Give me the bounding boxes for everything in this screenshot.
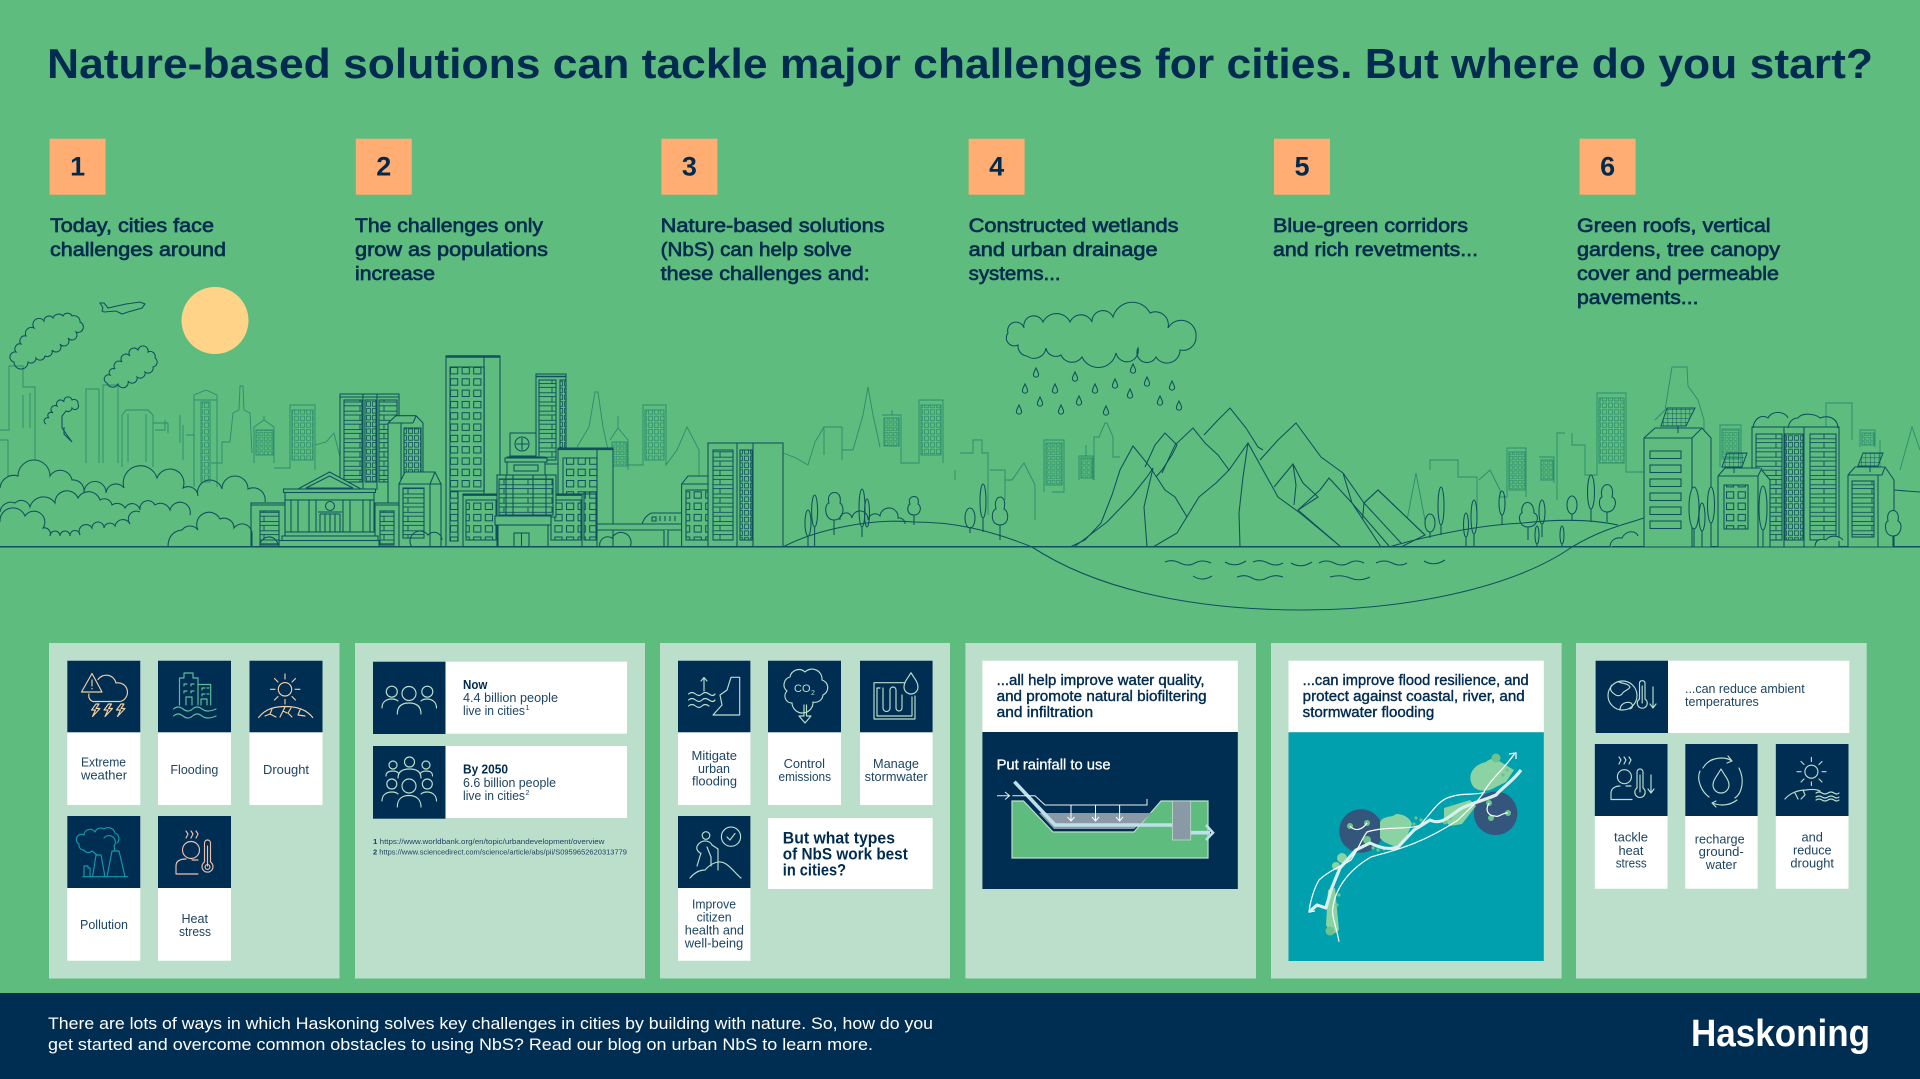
footer text: get started and overcome common obstacles to using NbS? Read our blog on urban NbS to learn more. (48, 1035, 873, 1054)
card: extreme weather (67, 661, 140, 805)
step 6: cover and permeable (1577, 263, 1779, 285)
card: heat stress: stress (179, 924, 211, 939)
mountains (1070, 408, 1425, 547)
card: reduce drought: reduce (1793, 843, 1832, 858)
icon: person and thermometer (1611, 757, 1654, 800)
step 6: gardens, tree canopy (1577, 239, 1780, 261)
right trees (1610, 486, 1901, 547)
smoke clouds (10, 313, 157, 442)
step 3: these challenges and: (661, 263, 870, 285)
diagram: put rainfall to use: Put rainfall to use (997, 757, 1111, 773)
row: ambient temperatures (1596, 661, 1849, 733)
card: recharge groundwater: water (1705, 857, 1737, 872)
background skyline (0, 366, 1920, 520)
icon: flood bank (688, 677, 740, 715)
card: control emissions: 2 (811, 690, 815, 697)
logo: Haskoning: Haskoning (1691, 1013, 1870, 1055)
card: recharge groundwater (1685, 744, 1758, 889)
icon: globe and thermometer (1608, 681, 1656, 710)
step 1: Today, cities face (50, 215, 214, 237)
footer text (48, 1014, 933, 1054)
card: control emissions (768, 661, 841, 805)
card: reduce drought (1776, 744, 1848, 889)
card: tackle heat stress: stress (1616, 856, 1647, 871)
row: by 2050: By 2050 (463, 762, 508, 777)
card: manage stormwater: stormwater (865, 769, 928, 784)
callout: flood resilience: protect against coastal, river, and (1303, 689, 1525, 705)
card: pollution: Pollution (80, 917, 128, 932)
card: mitigate urban flooding: urban (698, 761, 730, 776)
icon: sun, earth and water (1785, 758, 1839, 801)
panel 3 (660, 643, 950, 978)
callout: question: But what types (783, 829, 895, 847)
step 2: grow as populations (355, 239, 548, 261)
step 6: pavements... (1577, 287, 1698, 309)
step 5: Blue-green corridors (1273, 215, 1468, 237)
callout: flood resilience (1288, 661, 1544, 732)
callout: water quality (982, 661, 1238, 732)
card: pollution (67, 816, 140, 961)
step 5: and rich revetments... (1273, 239, 1478, 261)
callout: water quality: and promote natural biofiltering (997, 689, 1207, 705)
step 2: The challenges only (355, 215, 543, 237)
card: mitigate urban flooding: Mitigate (692, 748, 737, 763)
card: extreme weather: weather (80, 768, 128, 782)
panel 4 (965, 643, 1256, 978)
callout: question (768, 818, 933, 889)
footnotes: 1 https://www.worldbank.org/en/topic/urbandevelopment/overview (373, 837, 605, 846)
footer (0, 993, 1920, 1079)
icon: flooding (174, 673, 216, 718)
icon: extreme weather (82, 674, 127, 716)
callout: question: in cities? (783, 861, 846, 879)
step 1 (50, 139, 226, 261)
callout: flood resilience: stormwater flooding (1303, 705, 1434, 721)
panel 1 (49, 643, 340, 978)
solar panels (1661, 408, 1883, 473)
card: improve citizen health: health and (685, 923, 744, 938)
card: reduce drought: drought (1790, 855, 1834, 870)
footnotes: 2 https://www.sciencedirect.com/science/article/abs/pii/S0959652620313779 (373, 848, 627, 856)
row: ambient temperatures: temperatures (1685, 694, 1759, 709)
card: improve citizen health (678, 816, 750, 961)
row: by 2050 (373, 746, 627, 819)
row: now: 4.4 billion people (463, 690, 558, 705)
diagram: put rainfall to use (982, 732, 1238, 889)
card: manage stormwater: Manage (873, 756, 919, 771)
card: extreme weather: Extreme (81, 755, 126, 770)
step 3: 3 (682, 152, 697, 182)
row: ambient temperatures: ...can reduce ambient (1685, 681, 1805, 696)
footer text: There are lots of ways in which Haskoning solves key challenges in cities by building with nature. So, how do you (48, 1014, 933, 1033)
icon: sun (182, 287, 248, 354)
step 6: 6 (1600, 152, 1615, 182)
title: Nature-based solutions can tackle major challenges for cities. But where do you start? (47, 40, 1873, 87)
card: mitigate urban flooding: flooding (692, 774, 737, 789)
step 4 (969, 139, 1179, 285)
step 4: 4 (989, 152, 1004, 182)
card: manage stormwater (860, 661, 933, 805)
icon: drought (259, 674, 313, 718)
card: improve citizen health: Improve (692, 897, 736, 912)
card: improve citizen health: well-being (684, 936, 743, 950)
map: blue-green corridor (1288, 732, 1544, 961)
step 2: increase (355, 263, 435, 285)
green-roof buildings (1644, 412, 1920, 547)
step 3: Nature-based solutions (661, 215, 885, 237)
icon: CO2 cloud (784, 669, 828, 723)
step 3: (NbS) can help solve (661, 239, 852, 261)
step 1: 1 (70, 152, 85, 182)
card: drought (250, 661, 322, 805)
row: by 2050: live in cities (463, 788, 525, 803)
card: control emissions: Control (784, 756, 825, 771)
icon: aeroplane (100, 302, 145, 314)
row: now: 1 (526, 705, 530, 712)
card: heat stress: Heat (182, 911, 208, 926)
footnotes (373, 837, 627, 856)
bushes and trees (0, 460, 1615, 547)
panel 6 (1576, 643, 1867, 978)
icon: heat stress (176, 831, 213, 874)
row: now: live in cities (463, 703, 525, 718)
row: now (373, 662, 627, 734)
step 2: 2 (376, 152, 391, 182)
step 4: Constructed wetlands (969, 215, 1179, 237)
panel 5 (1271, 643, 1562, 978)
icon: lake waves (1165, 560, 1445, 580)
card: tackle heat stress: heat (1618, 843, 1644, 858)
card: drought: Drought (263, 762, 309, 777)
card: reduce drought: and (1802, 829, 1823, 844)
panel 2 (355, 643, 645, 978)
step 5: 5 (1294, 152, 1310, 182)
step 2 (355, 139, 548, 285)
row: by 2050: 6.6 billion people (463, 775, 556, 790)
card: flooding: Flooding (170, 762, 218, 777)
step 3 (661, 139, 885, 285)
icon: water cycle drop (1699, 756, 1742, 807)
callout: flood resilience: ...can improve flood resilience, and (1303, 673, 1529, 689)
icon: three people (382, 686, 436, 714)
step 4: and urban drainage (969, 239, 1158, 261)
card: flooding (158, 661, 231, 805)
callout: water quality: ...all help improve water quality, (997, 673, 1205, 689)
callout: question: of NbS work best (783, 845, 908, 863)
card: mitigate urban flooding (678, 661, 750, 805)
card: recharge groundwater: recharge (1695, 831, 1745, 846)
icon: pollution (76, 828, 128, 877)
card: control emissions: emissions (778, 769, 831, 784)
icon: stormwater (874, 673, 918, 719)
step 6: Green roofs, vertical (1577, 215, 1771, 237)
step 5 (1273, 139, 1478, 261)
step 6 (1577, 139, 1780, 309)
row: by 2050: 2 (526, 790, 530, 797)
row: now: Now (463, 677, 488, 692)
card: control emissions: CO (794, 683, 811, 695)
card: tackle heat stress (1595, 744, 1668, 889)
museum building (279, 472, 379, 547)
card: recharge groundwater: ground- (1699, 844, 1744, 859)
icon: rain cloud (1006, 302, 1196, 415)
main city buildings (251, 356, 783, 547)
icon: crowd of people (382, 757, 436, 807)
step 1: challenges around (50, 239, 226, 261)
icon: hills and lake (0, 518, 1920, 610)
card: improve citizen health: citizen (697, 910, 732, 925)
card: heat stress (158, 816, 231, 961)
step 4: systems... (969, 263, 1061, 285)
icon: hiker (690, 827, 741, 878)
card: tackle heat stress: tackle (1614, 830, 1648, 845)
callout: water quality: and infiltration (997, 705, 1093, 721)
